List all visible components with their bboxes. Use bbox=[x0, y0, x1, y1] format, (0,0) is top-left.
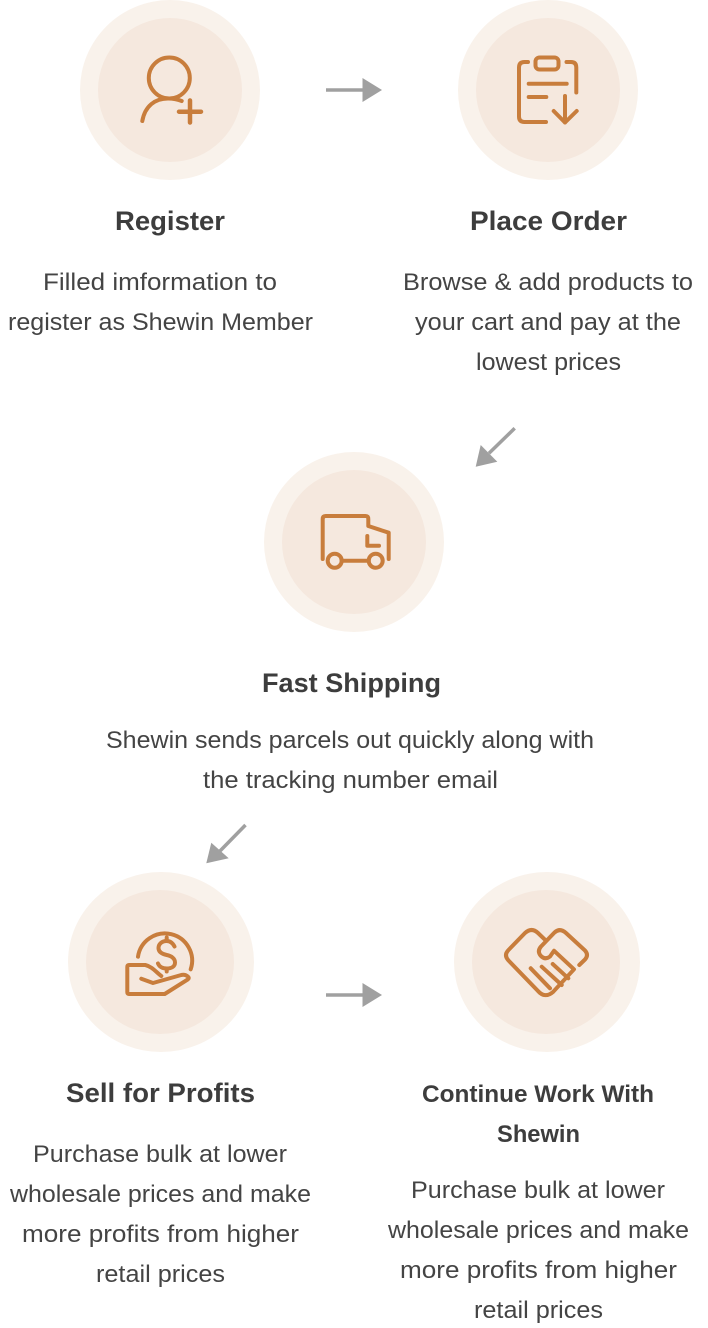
text: continue description: more profits from higher bbox=[400, 1257, 677, 1284]
heading: sell for profits: Sell for Profits bbox=[66, 1078, 255, 1108]
arrow: fast shipping to sell for profits bbox=[206, 825, 246, 863]
text: sell for profits description: more profits from higher bbox=[22, 1221, 299, 1248]
text: place order description bbox=[403, 269, 693, 376]
text: continue description: Purchase bulk at lower bbox=[411, 1177, 665, 1204]
text: sell for profits description: wholesale prices and make bbox=[9, 1181, 311, 1208]
icon: hand holding coin bbox=[68, 872, 254, 1052]
text: sell for profits description: Purchase bulk at lower bbox=[33, 1141, 287, 1168]
step: sell for profits bbox=[9, 872, 311, 1288]
heading: continue work with shewin bbox=[422, 1081, 654, 1148]
text: continue description: retail prices bbox=[474, 1297, 603, 1324]
heading: register: Register bbox=[115, 206, 225, 236]
heading: fast shipping: Fast Shipping bbox=[262, 668, 441, 698]
arrow: place order to fast shipping bbox=[476, 428, 515, 467]
text: place order description: Browse & add products to bbox=[403, 269, 693, 296]
text: sell for profits description bbox=[9, 1141, 311, 1288]
text: place order description: your cart and pay at the bbox=[415, 309, 681, 336]
text: continue description: wholesale prices and make bbox=[387, 1217, 689, 1244]
text: place order description: lowest prices bbox=[476, 349, 621, 376]
text: register description bbox=[8, 269, 313, 336]
icon: clipboard with down arrow bbox=[458, 0, 638, 180]
arrow: register to place order bbox=[326, 78, 382, 102]
heading: continue work with shewin: Continue Work With bbox=[422, 1081, 654, 1108]
text: sell for profits description: retail prices bbox=[96, 1261, 225, 1288]
heading: continue work with shewin: Shewin bbox=[497, 1121, 580, 1148]
text: fast shipping description: Shewin sends parcels out quickly along with bbox=[106, 727, 594, 754]
step: place order bbox=[403, 0, 693, 376]
arrow: sell for profits to continue bbox=[326, 983, 382, 1007]
text: fast shipping description bbox=[106, 727, 594, 794]
icon: delivery truck bbox=[264, 452, 444, 632]
heading: place order: Place Order bbox=[470, 206, 628, 236]
text: fast shipping description: the tracking number email bbox=[203, 767, 498, 794]
text: register description: Filled imformation to bbox=[43, 269, 277, 296]
step: continue work with shewin bbox=[387, 872, 689, 1324]
text: continue description bbox=[387, 1177, 689, 1324]
step: register bbox=[8, 0, 313, 336]
icon: handshake bbox=[454, 872, 640, 1052]
text: register description: register as Shewin Member bbox=[8, 309, 313, 336]
step: fast shipping bbox=[106, 452, 594, 794]
icon: user with plus bbox=[80, 0, 260, 180]
